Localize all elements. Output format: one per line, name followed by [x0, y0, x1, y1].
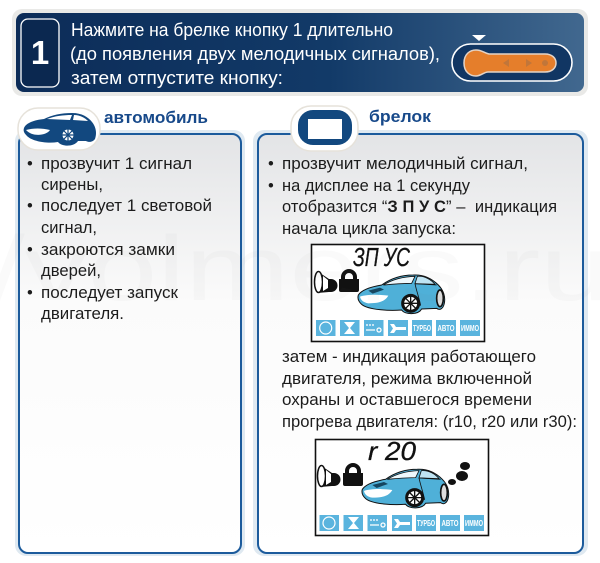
panel: брелок [253, 106, 588, 556]
car illustration [362, 469, 449, 508]
icon: siren [318, 465, 340, 487]
car illustration [358, 275, 445, 314]
text: engine running [282, 348, 577, 431]
display: warm-up [316, 436, 488, 536]
instruction text [70, 20, 440, 88]
heading: брелок: брелок [369, 107, 432, 126]
icon: fob [291, 106, 358, 151]
list: car actions: • [27, 155, 33, 173]
display readout: ЗП УС [353, 242, 410, 272]
text: fob actions: • [268, 177, 274, 195]
status icons: АВТО [442, 519, 458, 528]
status icons: ТУРБО [417, 519, 435, 528]
instruction text: (до появления двух мелодичных сигналов), [70, 44, 440, 64]
icon: siren [314, 271, 338, 293]
text: engine running: охраны и оставшегося времени [282, 391, 532, 409]
status icons: ИММО [465, 519, 483, 528]
text: fob actions: • [268, 155, 274, 173]
display readout: r 20 [368, 436, 417, 466]
list: car actions: • [27, 197, 33, 215]
list: car actions: сирены, [41, 176, 103, 194]
status icons [316, 320, 480, 336]
text: fob actions: отобразится “З П У С” – индикация [282, 198, 557, 216]
icon: lock [339, 269, 359, 292]
list: car actions: закроются замки [41, 241, 175, 259]
list: car actions: • [27, 284, 33, 302]
display: start cycle [312, 242, 484, 342]
list: car actions: последует 1 световой [41, 197, 212, 215]
icon: exhaust smoke [448, 462, 470, 485]
list: car actions [27, 155, 212, 323]
instruction text: затем отпустите кнопку: [71, 68, 283, 88]
icon: key fob button [452, 35, 572, 81]
text: engine running: прогрева двигателя: (r10, r20 или r30): [282, 413, 577, 431]
panel: автомобиль [15, 108, 245, 556]
watermark: /volmers.ru [0, 218, 600, 320]
text: fob actions: на дисплее на 1 секунду [282, 177, 471, 195]
instruction text: Нажмите на брелке кнопку 1 длительно [71, 20, 393, 40]
banner: instruction [12, 9, 588, 96]
icon: lock [343, 463, 363, 486]
list: car actions: дверей, [41, 262, 101, 280]
list: car actions: двигателя. [41, 305, 124, 323]
text: engine running: затем - индикация работающего [282, 348, 536, 366]
list: car actions: последует запуск [41, 284, 179, 302]
step number badge: 1 [31, 34, 49, 71]
text: fob actions [268, 155, 557, 238]
status icons: ТУРБО [413, 324, 431, 333]
text: fob actions: прозвучит мелодичный сигнал, [282, 155, 528, 173]
status icons: ИММО [461, 324, 479, 333]
status icons [320, 515, 484, 531]
icon: car [18, 108, 100, 150]
text: fob actions: начала цикла запуска: [282, 220, 456, 238]
list: car actions: сигнал, [41, 219, 97, 237]
status icons: АВТО [438, 324, 454, 333]
step number badge [21, 19, 59, 87]
list: car actions: прозвучит 1 сигнал [41, 155, 192, 173]
list: car actions: • [27, 241, 33, 259]
heading: автомобиль: автомобиль [104, 108, 208, 127]
text: engine running: двигателя, режима включенной [282, 370, 532, 388]
